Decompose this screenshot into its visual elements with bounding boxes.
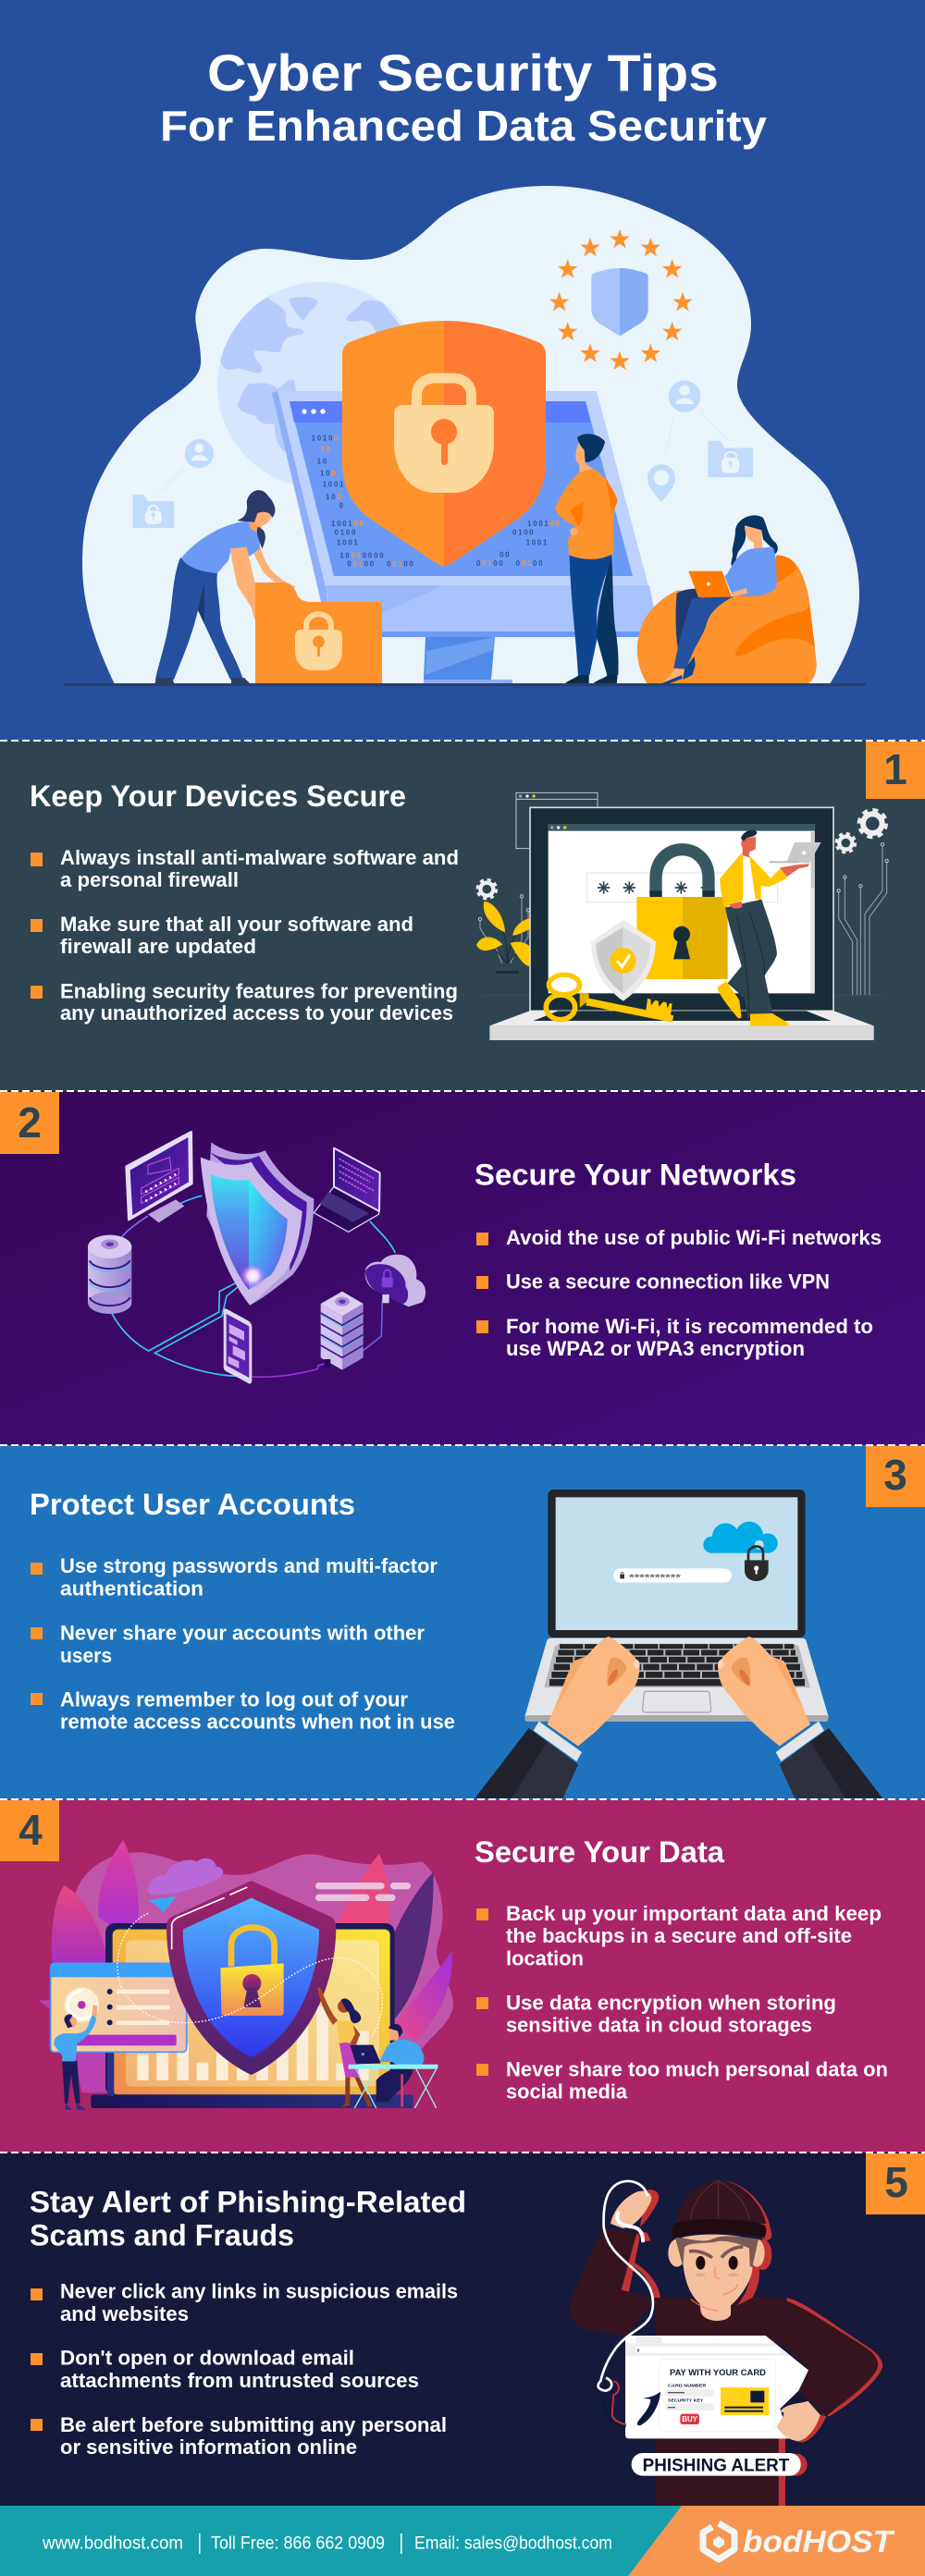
password field bbox=[613, 1568, 732, 1583]
icon: plant bbox=[476, 902, 529, 974]
illustration: binary code right: 1001 bbox=[526, 539, 549, 547]
hand holding window bbox=[777, 2401, 826, 2443]
head with beanie bbox=[668, 2180, 771, 2321]
icon: monitor bbox=[127, 1132, 191, 1222]
number badge 3: 3 bbox=[883, 1451, 907, 1499]
bullet 2 bbox=[31, 2347, 419, 2392]
person pointing at panel bbox=[54, 2005, 97, 2110]
number badge 1: 1 bbox=[883, 745, 907, 793]
icon: laptop bbox=[314, 1148, 380, 1232]
bullet 1: Always install anti-malware software and bbox=[60, 846, 459, 869]
bullet 2: sensitive data in cloud storages bbox=[506, 2014, 812, 2036]
bullet 3: Never share too much personal data on bbox=[506, 2058, 888, 2080]
illustration: globe bbox=[217, 282, 424, 488]
icon: phishing hook and line bbox=[598, 2181, 653, 2425]
panel: tip 2 secure your networks bbox=[0, 1091, 925, 1445]
bullet 1 bbox=[31, 1554, 438, 1600]
illustration: binary code right: 00100 bbox=[516, 559, 544, 568]
bullet 3 bbox=[31, 1688, 455, 1733]
heading: Secure Your Data bbox=[475, 1835, 724, 1869]
password field: ********** bbox=[629, 1573, 682, 1582]
icon: shield with padlock bbox=[166, 1881, 336, 2075]
browser payment window: BUY bbox=[682, 2415, 698, 2423]
bullet 1: Avoid the use of public Wi-Fi networks bbox=[506, 1226, 882, 1249]
bullet 2: users bbox=[60, 1644, 112, 1667]
icon: big shield with padlock bbox=[342, 321, 546, 566]
panel: tip 5 phishing bbox=[0, 2153, 925, 2508]
illustration: woman on bean bag with laptop bbox=[637, 515, 817, 685]
illustration: binary code right: 100100 bbox=[527, 520, 561, 528]
illustration: binary code left: 00100 bbox=[347, 559, 376, 568]
title bbox=[160, 43, 767, 150]
illustration: binary code left: 10 bbox=[321, 446, 332, 454]
illustration: binary code left: 0 bbox=[339, 501, 345, 509]
bullet 3 bbox=[476, 1315, 873, 1360]
illustration: binary code left: 0100 bbox=[335, 528, 357, 536]
illustration: binary code left: 10010000 bbox=[339, 551, 385, 559]
bullet 2: Make sure that all your software and bbox=[60, 913, 413, 936]
panel: tip 4 secure your data bbox=[0, 1799, 925, 2153]
title: For Enhanced Data Security bbox=[160, 102, 767, 150]
bullet 3: or sensitive information online bbox=[60, 2435, 357, 2459]
bullet 3: Be alert before submitting any personal bbox=[60, 2413, 447, 2436]
number badge 2: 2 bbox=[18, 1098, 42, 1147]
illustration: isometric network around shield bbox=[88, 1132, 426, 1384]
illustration: hacker with phishing hook bbox=[570, 2180, 882, 2508]
icon: database bbox=[88, 1235, 131, 1314]
bullet 3: For home Wi-Fi, it is recommended to bbox=[506, 1315, 873, 1338]
illustration: binary code right: 0100 bbox=[512, 528, 535, 536]
bullet 3: use WPA2 or WPA3 encryption bbox=[506, 1337, 805, 1360]
bullet 2 bbox=[476, 1992, 836, 2036]
illustration: binary code left: 1001 bbox=[337, 539, 359, 547]
icon: right hand and sleeve bbox=[718, 1637, 882, 1798]
bullet 3: Always remember to log out of your bbox=[60, 1688, 408, 1711]
person pointing at shield bbox=[317, 1987, 373, 2107]
illustration: binary code left bbox=[312, 435, 415, 568]
browser payment window: PAY WITH YOUR CARD bbox=[670, 2368, 766, 2377]
bullet 2: firewall are updated bbox=[60, 935, 256, 958]
badge: phishing alert: PHISHING ALERT bbox=[643, 2457, 790, 2476]
illustration: man with laptop bbox=[717, 830, 821, 1025]
illustration: binary code left: 1001 bbox=[323, 481, 345, 489]
dashboard panel bbox=[51, 1963, 187, 2096]
number badge 5: 5 bbox=[884, 2158, 908, 2206]
panel: tip 1 keep your devices secure bbox=[0, 741, 925, 1091]
illustration: binary code left: 10100 bbox=[312, 435, 339, 443]
icon: orange locked folder bbox=[255, 583, 382, 685]
illustration: binary code left: 00100 bbox=[387, 559, 415, 568]
icon: left user and folder bbox=[132, 439, 214, 528]
bullet 2: Use data encryption when storing bbox=[506, 1992, 836, 2014]
heading: Keep Your Devices Secure bbox=[30, 779, 406, 813]
bullet 3 bbox=[476, 2058, 888, 2103]
browser payment window: SECURITY KEY bbox=[668, 2398, 704, 2404]
bullet 2 bbox=[31, 1622, 425, 1667]
bullet 1 bbox=[476, 1902, 882, 1969]
illustration: hands on laptop bbox=[475, 1490, 882, 1798]
number badge 3 bbox=[866, 1446, 925, 1507]
number badge 1 bbox=[866, 742, 925, 799]
bullet 1 bbox=[31, 2280, 458, 2325]
heading: Stay Alert of Phishing-Related bbox=[30, 2186, 466, 2219]
contact details: Email: sales@bodhost.com bbox=[414, 2533, 612, 2554]
bullet 3: Enabling security features for preventing bbox=[60, 980, 458, 1002]
icon: shield with check bbox=[591, 920, 656, 1001]
number badge 5 bbox=[866, 2153, 925, 2214]
number badge 4: 4 bbox=[18, 1806, 43, 1854]
bullet 2: attachments from untrusted sources bbox=[60, 2369, 419, 2392]
laptop bbox=[91, 1923, 413, 2108]
bullet 3: social media bbox=[506, 2080, 628, 2103]
illustration: woman carrying folder bbox=[154, 490, 296, 685]
title: Cyber Security Tips bbox=[207, 43, 719, 102]
icon: key bbox=[546, 975, 673, 1023]
icon: ring of stars with small shield bbox=[549, 229, 693, 370]
person seated at desk bbox=[349, 2024, 438, 2108]
logo: bodHOST: bodHOST bbox=[743, 2524, 895, 2558]
icon: left hand and sleeve bbox=[475, 1637, 640, 1798]
number badge 4 bbox=[0, 1800, 59, 1861]
illustration: standing man bbox=[555, 434, 619, 684]
browser payment window bbox=[625, 2336, 808, 2438]
icon: server tower bbox=[321, 1292, 364, 1370]
bullet 3: remote access accounts when not in use bbox=[60, 1711, 455, 1733]
illustration: binary code right: 00100 bbox=[476, 559, 505, 568]
illustration: binary code right: 00 bbox=[500, 551, 511, 559]
bullet 1: and websites bbox=[60, 2302, 189, 2325]
password field bbox=[586, 873, 778, 902]
panel: tip 3 protect user accounts bbox=[0, 1445, 925, 1799]
illustration: monitor bbox=[272, 391, 659, 685]
icon: gears bbox=[477, 810, 886, 899]
contact details: Toll Free: 866 662 0909 bbox=[211, 2533, 385, 2554]
bullet 1: the backups in a secure and off-site bbox=[506, 1924, 852, 1947]
bullet 3 bbox=[31, 2413, 447, 2459]
footer bar bbox=[0, 2506, 925, 2576]
bullet 2: Never share your accounts with other bbox=[60, 1622, 425, 1644]
icon: right user, pin and folder bbox=[648, 380, 753, 502]
bullet 1: a personal firewall bbox=[60, 868, 239, 891]
bullet 2 bbox=[31, 913, 413, 958]
panel: header hero bbox=[0, 0, 925, 741]
heading bbox=[30, 2186, 466, 2252]
browser payment window: x bbox=[637, 2348, 640, 2353]
bullet 1 bbox=[31, 846, 459, 891]
laptop screen bbox=[548, 1490, 806, 1638]
bullet 1: Use strong passwords and multi-factor bbox=[60, 1554, 438, 1577]
browser payment window: CARD NUMBER bbox=[668, 2384, 707, 2389]
bullet 1: authentication bbox=[60, 1577, 204, 1600]
icon: phone bbox=[224, 1308, 252, 1384]
laptop base and keyboard bbox=[524, 1638, 829, 1722]
illustration: binary code left: 100100 bbox=[331, 520, 365, 528]
illustration: background blob bbox=[82, 186, 859, 684]
laptop base bbox=[489, 1011, 874, 1040]
icon: yellow padlock bbox=[636, 850, 728, 979]
illustration: binary code left: 10 bbox=[317, 457, 328, 465]
illustration: binary code right bbox=[476, 520, 561, 568]
icon: cloud and open lock bbox=[703, 1522, 778, 1581]
illustration: shield, laptop and people bbox=[39, 1840, 453, 2110]
heading: Secure Your Networks bbox=[475, 1158, 796, 1191]
contact details bbox=[42, 2533, 612, 2554]
icon: shield bbox=[201, 1143, 314, 1306]
bullet 1: Back up your important data and keep bbox=[506, 1902, 882, 1925]
bullet 3 bbox=[31, 980, 458, 1024]
bullet 1: location bbox=[506, 1947, 584, 1969]
bullet 3: any unauthorized access to your devices bbox=[60, 1001, 453, 1024]
ground line bbox=[65, 683, 866, 686]
heading: Scams and Frauds bbox=[30, 2219, 294, 2252]
heading: Protect User Accounts bbox=[30, 1488, 355, 1521]
bullet 2: Use a secure connection like VPN bbox=[506, 1270, 830, 1293]
logo: bodHOST bbox=[703, 2523, 895, 2559]
number badge 2 bbox=[0, 1092, 59, 1154]
illustration: binary code left: 100 bbox=[326, 493, 342, 501]
contact details: www.bodhost.com bbox=[42, 2533, 183, 2554]
bullet 1: Never click any links in suspicious emails bbox=[60, 2280, 458, 2302]
section dividers bbox=[0, 741, 925, 2153]
illustration: laptop with padlock, key and man bbox=[476, 792, 888, 1040]
icon: cloud lock bbox=[365, 1255, 426, 1306]
bullet 2: Don't open or download email bbox=[60, 2347, 354, 2369]
illustration: binary code left: 100 bbox=[320, 469, 337, 477]
